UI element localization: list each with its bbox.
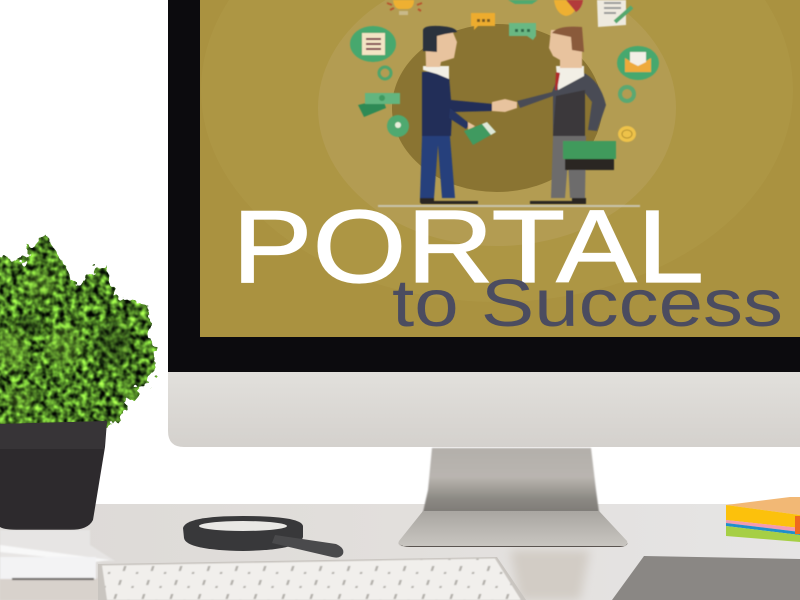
icon: envelope badge: [617, 46, 659, 80]
papers and notebook: [0, 530, 115, 600]
icon: yellow speech bubble: [471, 13, 495, 30]
subheading: to Success: to Success: [392, 266, 783, 341]
icon: banknotes: [358, 93, 400, 117]
right businessman: [517, 27, 606, 204]
desk reflection: [510, 550, 590, 600]
left businessman: [420, 26, 493, 204]
plant pot: [0, 421, 107, 530]
briefcase: [563, 141, 616, 170]
screen: [200, 0, 800, 337]
keyboard: [98, 557, 526, 600]
calculator: [464, 122, 496, 145]
icon: pie chart: [554, 0, 583, 16]
sticky note stack: [726, 505, 800, 528]
icon: clipboard badge: [350, 26, 396, 62]
icon: gear right: [620, 87, 634, 101]
screen dark centre: [392, 24, 602, 192]
handle: [272, 535, 343, 558]
plant foliage: [0, 234, 156, 426]
tablet: [612, 556, 800, 600]
icon: green speech bubble: [509, 23, 536, 40]
plant: [0, 234, 156, 530]
screen middle ring: [318, 0, 676, 246]
icon: green chart fragment: [508, 0, 538, 4]
icon: map pin badge: [387, 115, 409, 137]
sticky notes: [726, 497, 800, 542]
lens glass: [199, 521, 287, 531]
headline: PORTAL: PORTAL: [232, 189, 704, 304]
monitor stand foot: [398, 511, 627, 547]
screen background: [200, 0, 800, 337]
icon: coin: [618, 126, 636, 142]
icon: small gear left: [379, 67, 391, 79]
magnifying glass: [183, 516, 343, 558]
sticky note top: [726, 497, 800, 515]
lens rim: [183, 516, 303, 551]
screen outer glow: [201, 0, 793, 302]
monitor: [168, 0, 800, 547]
floor line: [378, 205, 640, 207]
monitor bezel: [168, 0, 800, 372]
icon: document and pencil: [597, 0, 632, 27]
monitor chin: [168, 370, 800, 447]
icon: light bulb: [387, 0, 422, 15]
illustration: handshake: [350, 0, 659, 207]
desk: [0, 504, 800, 600]
handshake hands: [492, 99, 517, 112]
monitor stand: [423, 448, 599, 512]
